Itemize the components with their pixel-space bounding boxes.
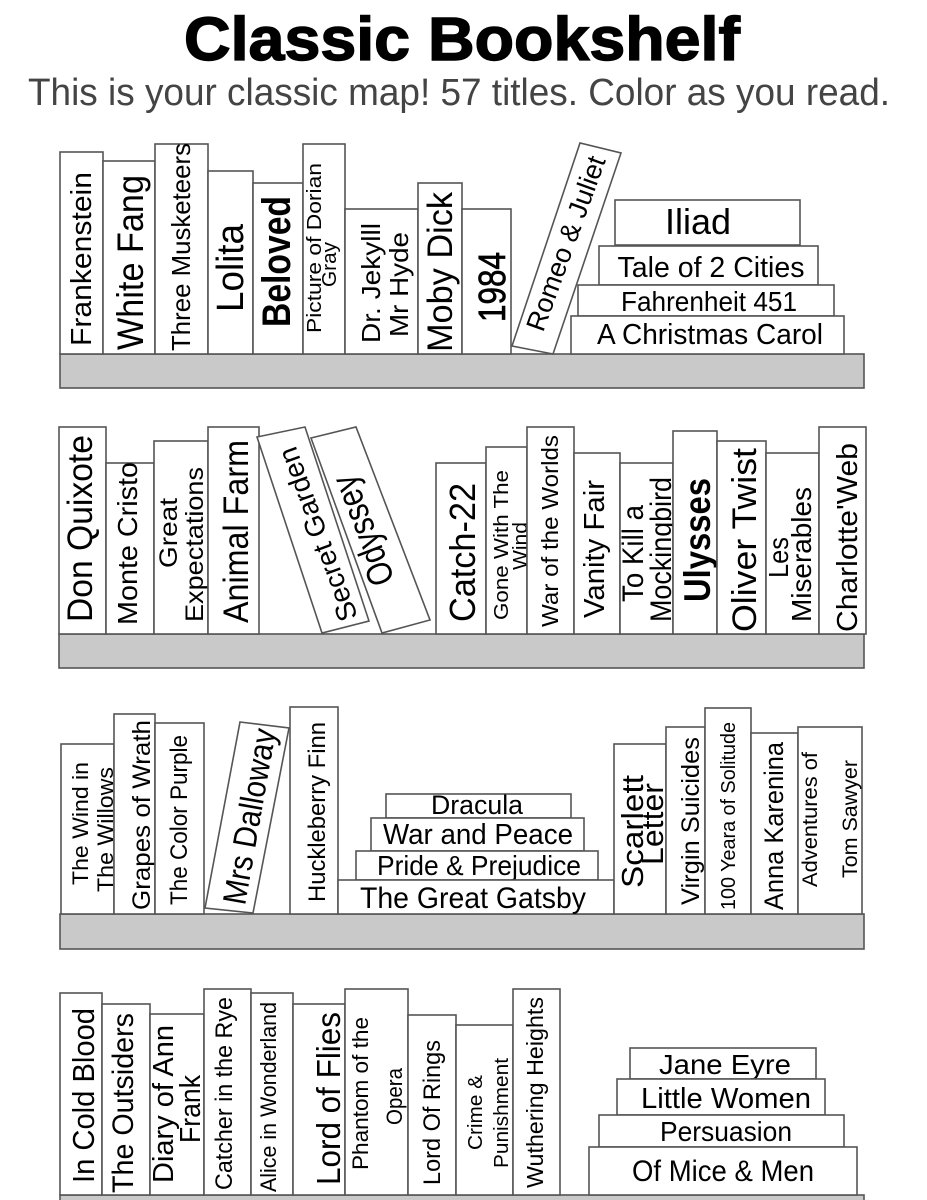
- book: Crime &amp; Punishment: [456, 1025, 513, 1195]
- book: Lord Of Rings: Lord Of Rings: [419, 1040, 446, 1185]
- book: The Color Purple: [155, 723, 204, 914]
- book: To Kill a Mockingbird: Mockingbird: [645, 477, 678, 622]
- book: A Christmas Carol: A Christmas Carol: [597, 319, 823, 351]
- book: Dracula: [386, 790, 571, 820]
- book: Beloved: Beloved: [255, 196, 299, 327]
- book: Monte Cristo: [106, 462, 154, 634]
- book: Odyssey: Odyssey: [323, 470, 402, 592]
- book: Odyssey: [311, 427, 430, 633]
- book: Lolita: Lolita: [210, 223, 252, 312]
- book: Three Musketeers: Three Musketeers: [166, 143, 196, 351]
- book: Crime &amp; Punishment: Crime &: [465, 1074, 487, 1150]
- book: Catcher in the Rye: [204, 989, 251, 1195]
- book: Scarlett Letter: Scarlett: [615, 775, 650, 888]
- book: Ulysses: Ulysses: [677, 478, 718, 602]
- book: Grapes of Wrath: Grapes of Wrath: [128, 720, 156, 910]
- book: The Wind in The Willows: The Wind in: [68, 762, 93, 885]
- book: Oliver Twist: Oliver Twist: [726, 447, 764, 632]
- book: Gone With The Wind: Wind: [510, 522, 532, 570]
- book: 1984: [462, 209, 514, 354]
- book: Alice in Wonderland: [251, 993, 293, 1195]
- shelf board 2: [59, 634, 864, 668]
- book: In Cold Blood: In Cold Blood: [66, 1008, 101, 1183]
- book: Diary of Ann Frank: Frank: [175, 1075, 207, 1143]
- book: The Outsiders: The Outsiders: [107, 1013, 140, 1193]
- book: Gone With The Wind: Gone With The: [491, 470, 513, 620]
- book: Wuthering Heights: [513, 989, 560, 1195]
- book: Catcher in the Rye: Catcher in the Rye: [211, 997, 238, 1190]
- book: Dr. Jekylll Mr Hyde: Mr Hyde: [384, 232, 414, 337]
- subtitle: This is your classic map! 57 titles. Color as you read.: [28, 72, 890, 114]
- book: Grapes of Wrath: [114, 714, 156, 914]
- book: Three Musketeers: [155, 143, 208, 354]
- book: The Wind in The Willows: [61, 744, 118, 914]
- book: Tale of 2 Cities: Tale of 2 Cities: [618, 252, 804, 284]
- book: Picture of Dorian Gray: Gray: [319, 242, 341, 287]
- book: Vanity Fair: Vanity Fair: [579, 480, 611, 618]
- book: Huckleberry Finn: Huckleberry Finn: [304, 722, 331, 902]
- title: Classic Bookshelf: [184, 5, 741, 73]
- book: Picture of Dorian Gray: [303, 144, 345, 354]
- book: Lord of Flies: Lord of Flies: [310, 1012, 347, 1185]
- book: Ulysses: [673, 431, 718, 634]
- book: Les Miserables: Miserables: [786, 487, 817, 622]
- book: War of the Worlds: [527, 427, 574, 634]
- book: Les Miserables: Les: [763, 537, 794, 578]
- book: Diary of Ann Frank: Diary of Ann: [148, 1025, 180, 1183]
- book: Dr. Jekylll Mr Hyde: [345, 209, 418, 354]
- book: Great Expectations: [154, 441, 209, 634]
- book: Frankenstein: [60, 152, 103, 354]
- book: Anna Karenina: [751, 733, 798, 914]
- book: Diary of Ann Frank: [148, 1014, 207, 1195]
- book: Scarlett Letter: [614, 744, 670, 914]
- book: Lord Of Rings: [408, 1015, 456, 1195]
- book: Charlotte's Web: Charlotte'Web: [832, 443, 864, 632]
- book: Moby Dick: Moby Dick: [421, 192, 460, 352]
- book: Lord of Flies: [293, 1004, 347, 1195]
- book: Fahrenheit 451: Fahrenheit 451: [621, 286, 797, 317]
- shelf board 4: [60, 1195, 864, 1200]
- shelf row 4: [60, 989, 864, 1200]
- book: Phantom of the Opera: Opera: [382, 1067, 407, 1125]
- book: Dracula: Dracula: [431, 790, 524, 820]
- book: Catch-22: Catch-22: [442, 483, 483, 622]
- book: Of Mice &amp; Men: Of Mice & Men: [632, 1155, 814, 1188]
- book: Crime &amp; Punishment: Punishment: [491, 1058, 513, 1168]
- book: Lolita: [208, 171, 253, 354]
- book: Frankenstein: Frankenstein: [66, 172, 98, 346]
- book: Persuasion: Persuasion: [660, 1116, 792, 1147]
- book: Animal Farm: Animal Farm: [217, 440, 256, 623]
- book: White Fang: White Fang: [110, 175, 151, 350]
- book: Charlotte's Web: [819, 427, 866, 634]
- book: War and Peace: War and Peace: [383, 819, 573, 851]
- book: Jane Eyre: Jane Eyre: [659, 1049, 791, 1080]
- book: To Kill a Mockingbird: To Kill a: [617, 505, 650, 602]
- book: Iliad: [615, 200, 800, 245]
- book: The Great Gatsby: The Great Gatsby: [360, 882, 586, 915]
- book: Pride &amp; Prejudice: Pride & Prejudice: [377, 850, 581, 881]
- book: Great Expectations: Expectations: [181, 467, 209, 622]
- book: Gone With The Wind: [486, 447, 532, 634]
- shelf board 3: [60, 914, 864, 949]
- book: The Wind in The Willows: The Willows: [93, 767, 118, 892]
- book: Picture of Dorian Gray: Picture of Dorian: [304, 163, 326, 333]
- book: Phantom of the Opera: [345, 989, 408, 1195]
- book: Virgin Suicides: [666, 727, 705, 914]
- book: Of Mice &amp; Men: [589, 1147, 857, 1195]
- book: To Kill a Mockingbird: [617, 463, 678, 634]
- book: Scarlett Letter: Letter: [635, 783, 670, 865]
- book: Don Quixote: Don Quixote: [61, 435, 100, 622]
- book: Iliad: Iliad: [665, 201, 731, 242]
- book: Alice in Wonderland: Alice in Wonderland: [256, 1002, 281, 1192]
- book: Persuasion: [599, 1115, 844, 1147]
- book: The Color Purple: The Color Purple: [166, 735, 193, 905]
- book: Great Expectations: Great: [155, 498, 183, 568]
- book: Huckleberry Finn: [290, 707, 338, 914]
- book: Little Women: Little Women: [641, 1083, 811, 1115]
- shelf row 1: [60, 143, 864, 388]
- book: Adventures of Tom Sawyer: Tom Sawyer: [839, 760, 862, 878]
- book: 1984: 1984: [472, 252, 514, 322]
- book: Romeo &amp; Juliet: Romeo & Juliet: [520, 151, 612, 335]
- book: Mrs Dalloway: Mrs Dalloway: [215, 725, 283, 907]
- book: Adventures of Tom Sawyer: Adventures of: [799, 752, 822, 887]
- book: Anna Karenina: Anna Karenina: [759, 741, 789, 910]
- book: War of the Worlds: War of the Worlds: [537, 435, 563, 627]
- book: Vanity Fair: [574, 453, 620, 634]
- book: Beloved: [253, 183, 303, 354]
- book: Wuthering Heights: Wuthering Heights: [522, 997, 548, 1188]
- book: Adventures of Tom Sawyer: [798, 727, 862, 914]
- book: Virgin Suicides: Virgin Suicides: [677, 737, 705, 905]
- book: 100 Years of Solitude: 100 Yeara of Solitude: [718, 722, 740, 910]
- shelf board 1: [60, 354, 864, 388]
- book: Dr. Jekylll Mr Hyde: Dr. Jekylll: [356, 223, 386, 343]
- book: Phantom of the Opera: Phantom of the: [348, 1017, 373, 1170]
- shelf row 3: [60, 707, 864, 949]
- book: 100 Years of Solitude: [705, 708, 751, 914]
- book: Les Miserables: [763, 453, 819, 634]
- shelf row 2: [59, 427, 866, 668]
- book: Jane Eyre: [630, 1048, 816, 1080]
- book: The Outsiders: [102, 1004, 150, 1195]
- book: Monte Cristo: Monte Cristo: [112, 462, 143, 625]
- book: Secret Garden: Secret Garden: [272, 443, 364, 626]
